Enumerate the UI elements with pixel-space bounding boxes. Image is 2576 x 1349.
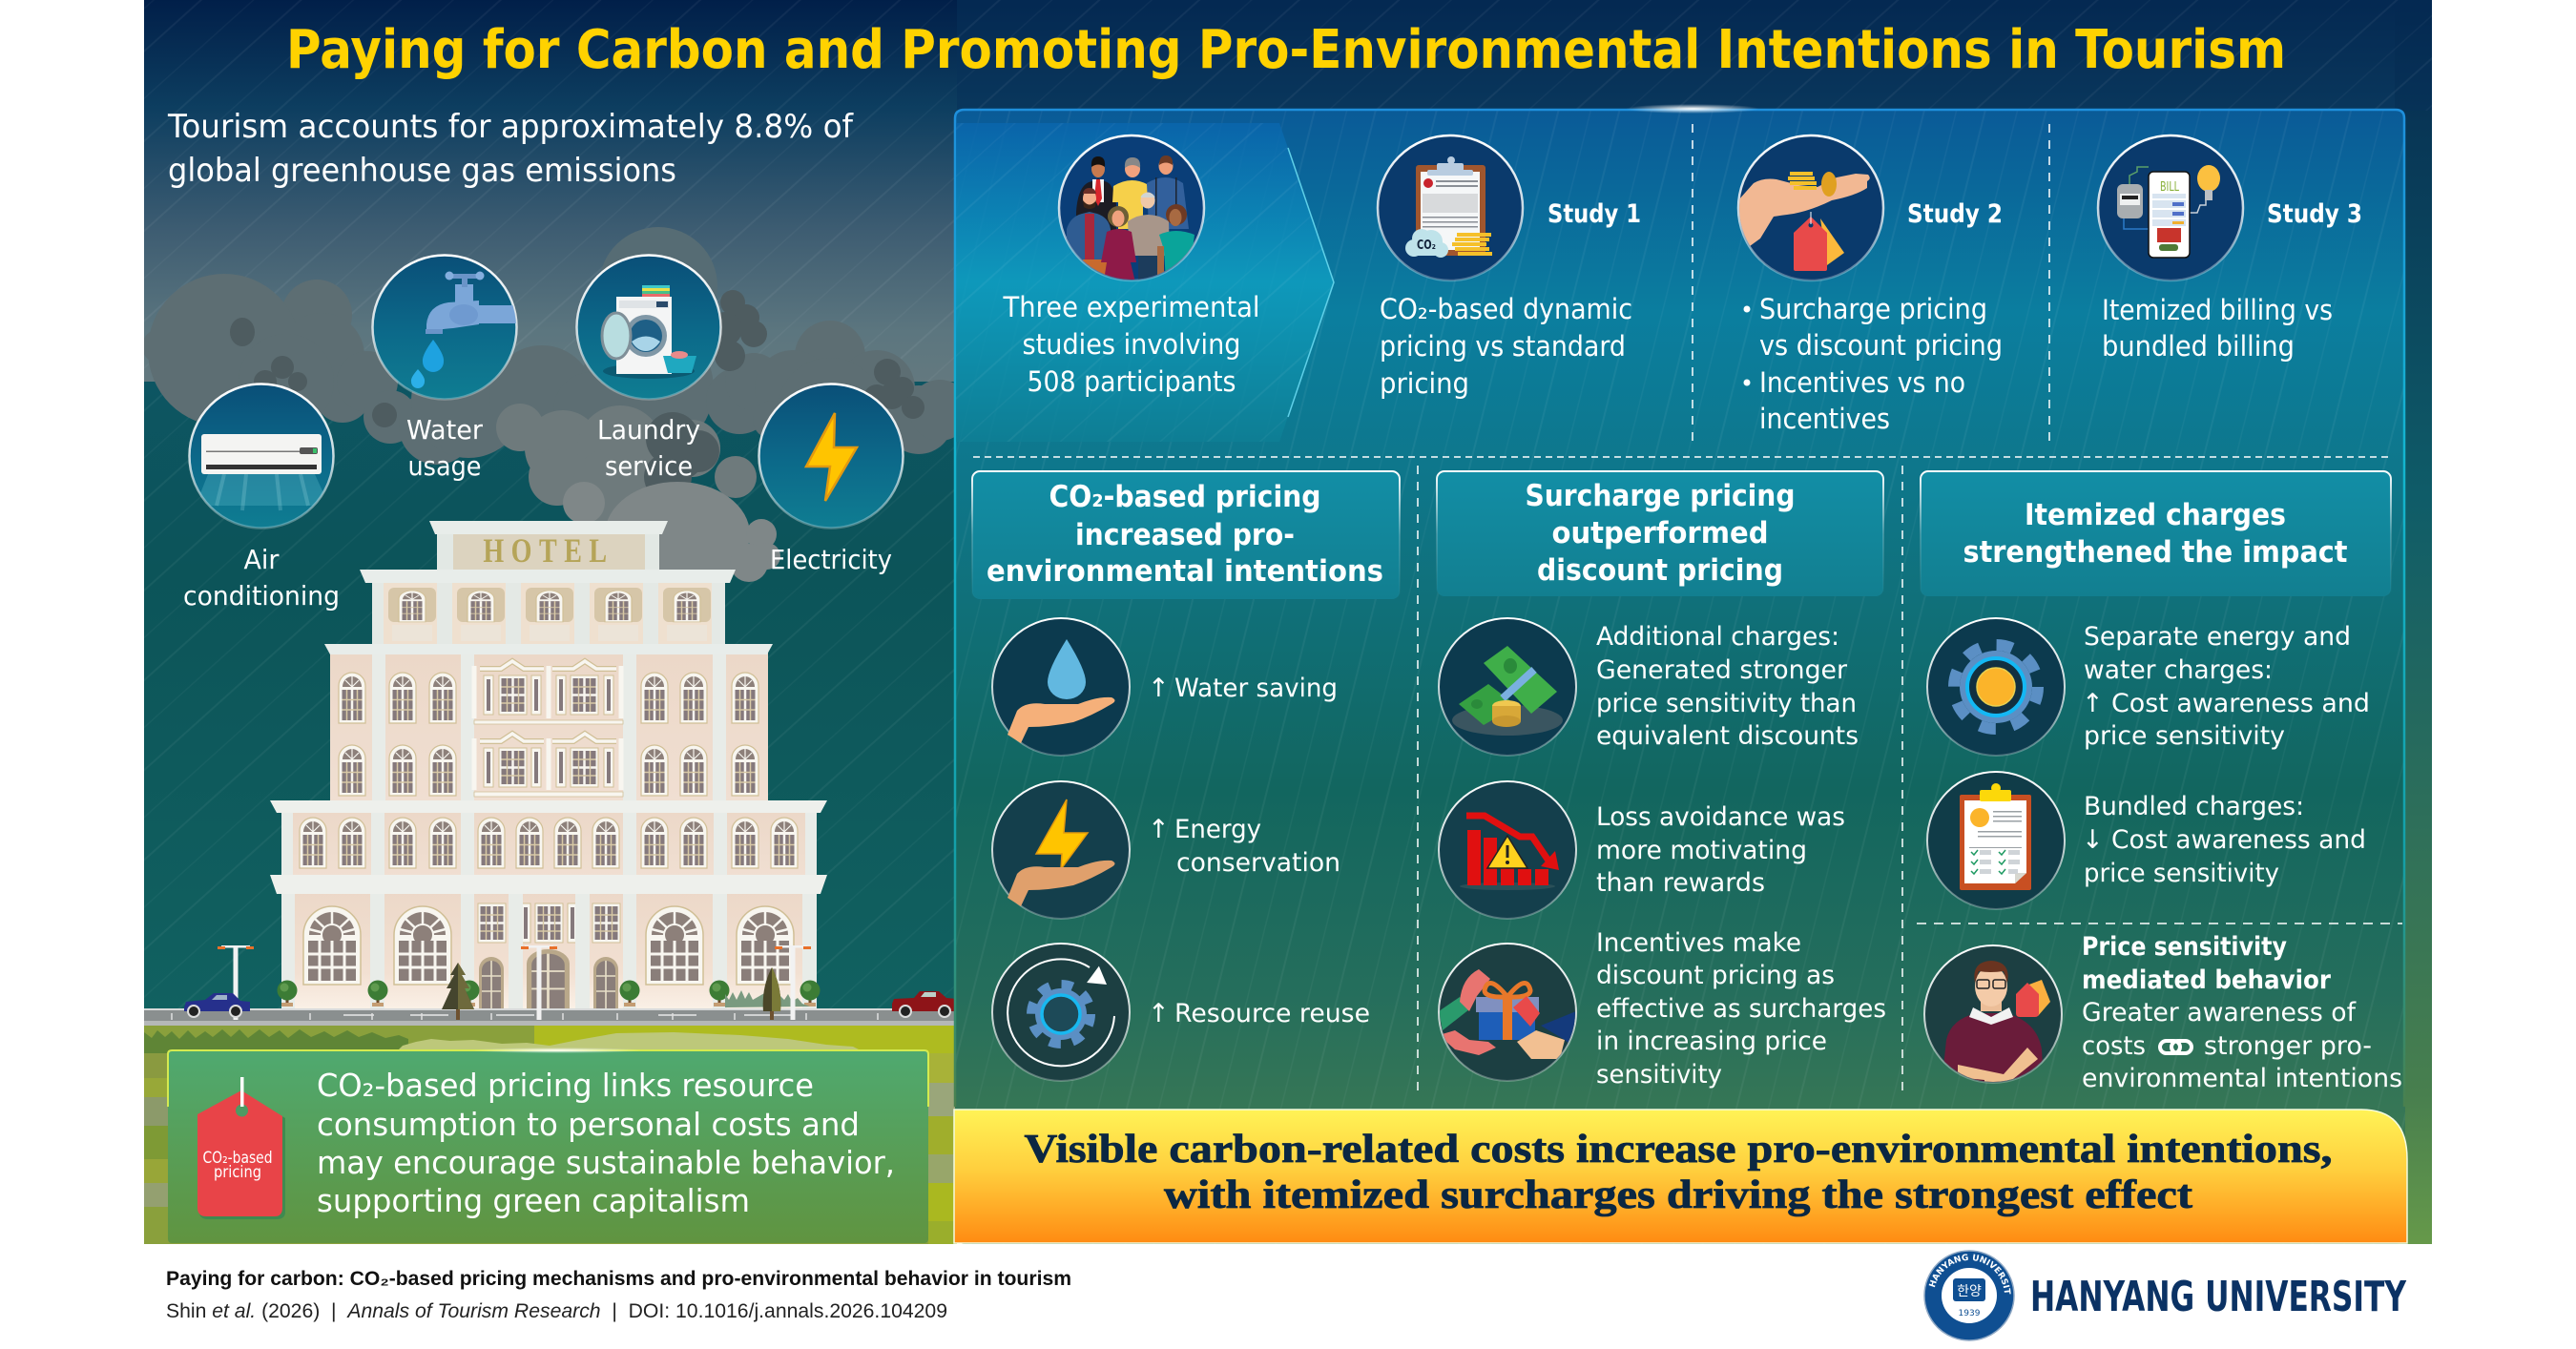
item: separate charges: water charges:: [2084, 655, 2273, 685]
item: incentives: sensitivity: [1596, 1060, 1722, 1090]
item: price sensitivity mediated behavior: environmental intentions: [2082, 1064, 2402, 1093]
hotel building: [270, 521, 827, 1008]
study 3: [2098, 135, 2362, 363]
icon: laundry: [576, 256, 721, 399]
item: incentives: discount pricing as: [1596, 961, 1835, 990]
header: CO2-based pricing: environmental intentions: [987, 554, 1383, 589]
panel: CO2 pricing callout: [168, 1048, 928, 1243]
item: energy conservation: [992, 781, 1340, 919]
street lamps: [218, 945, 811, 1020]
study 2 text: vs discount pricing: [1759, 329, 2003, 362]
study 1 text: pricing: [1380, 367, 1469, 400]
study 1 text: CO₂-based dynamic: [1380, 293, 1632, 325]
label: study 3: Study 3: [2267, 199, 2362, 229]
icon: air conditioning: [189, 384, 334, 529]
item: bundled charges: price sensitivity: [2084, 859, 2279, 888]
icon: red price tag: CO₂-based: [202, 1149, 273, 1168]
column 1: CO2-based pricing: [972, 471, 1400, 1081]
study 1 text: pricing vs standard: [1380, 330, 1626, 363]
callout text: supporting green capitalism: [317, 1182, 750, 1219]
header: CO2-based pricing: increased pro-: [1075, 518, 1295, 552]
middle tower wall: [330, 652, 768, 802]
header: surcharge pricing: discount pricing: [1537, 553, 1783, 588]
participants text: 508 participants: [1027, 365, 1236, 398]
blue car: [184, 993, 250, 1017]
item: price sensitivity mediated behavior: Greater awareness of: [2082, 998, 2357, 1027]
seal: 1939: [1959, 1309, 1981, 1318]
study 3 text: [2102, 294, 2333, 363]
item: energy conservation: ↑: [1148, 815, 1170, 844]
item: separate charges: Cost awareness and: [2111, 689, 2370, 718]
label: water usage: usage: [408, 450, 481, 482]
item: loss avoidance: than rewards: [1596, 868, 1765, 898]
seal: [1923, 1250, 2015, 1341]
item: price sensitivity mediated behavior: [1924, 932, 2402, 1093]
header: surcharge pricing: [1437, 471, 1883, 596]
footer citation: Shin et al. (2026) | Annals of Tourism Research | DOI: 10.1016/j.annals.2026.104209: [166, 1300, 947, 1322]
item: water saving: [992, 618, 1338, 756]
banner: key conclusion: with itemized surcharges driving the strongest effect: [1164, 1173, 2192, 1217]
item: separate charges: [1927, 618, 2370, 756]
arrow block: participants: [956, 123, 1334, 442]
header: surcharge pricing: outperformed: [1551, 516, 1769, 550]
label: air conditioning: conditioning: [183, 580, 340, 612]
item: price sensitivity mediated behavior: stronger pro-: [2204, 1031, 2372, 1061]
banner: key conclusion: Visible carbon-related costs increase pro-environmental intentions,: [1025, 1128, 2332, 1172]
study 3 text: bundled billing: [2102, 330, 2295, 363]
item: incentives: effective as surcharges: [1596, 994, 1886, 1024]
item: resource reuse: ↑: [1148, 999, 1170, 1028]
header: itemized charges: [1921, 471, 2391, 596]
callout text: consumption to personal costs and: [317, 1106, 860, 1143]
item: bundled charges: Bundled charges:: [2084, 792, 2304, 821]
participants text: Three experimental: [1003, 291, 1259, 323]
second floor: [281, 811, 817, 878]
callout text: [317, 1067, 895, 1219]
header: surcharge pricing: Surcharge pricing: [1525, 479, 1796, 513]
study 1 text: [1380, 293, 1632, 400]
upper floor wall: [372, 580, 725, 645]
study 2 text: Incentives vs no: [1759, 366, 1965, 399]
smoke clouds: [142, 227, 970, 587]
icon: clipboard with CO2 cloud: [1378, 135, 1523, 280]
label: study 1: Study 1: [1548, 199, 1641, 229]
study 3 text: Itemized billing vs: [2102, 294, 2333, 326]
label: study 2: Study 2: [1907, 199, 2003, 229]
label: water usage: [406, 414, 483, 482]
item: price sensitivity mediated behavior: Price sensitivity: [2082, 932, 2287, 962]
study 2 text: incentives: [1759, 403, 1890, 435]
item: separate charges: price sensitivity: [2084, 721, 2285, 751]
label: water usage: Water: [406, 414, 483, 446]
column 3: itemized charges: [1917, 471, 2402, 1093]
icon: link between awareness and intentions: [2160, 1041, 2192, 1053]
study 2 text: Surcharge pricing: [1759, 293, 1987, 325]
item: bundled charges: Cost awareness and: [2111, 825, 2366, 855]
icon: clipboard with CO2 cloud: CO₂: [1417, 239, 1436, 253]
participants text: studies involving: [1023, 328, 1240, 361]
footer citation: [166, 1268, 1071, 1322]
item: additional charges: Generated stronger: [1596, 655, 1848, 685]
icon: phone bill and meter: [2098, 135, 2243, 280]
header: itemized charges: Itemized charges: [2025, 498, 2286, 532]
item: separate charges: Separate energy and: [2084, 622, 2351, 652]
item: additional charges: Additional charges:: [1596, 622, 1839, 652]
item: bundled charges: ↓: [2082, 825, 2104, 855]
study 2 text: [1744, 293, 2003, 435]
label: laundry service: service: [605, 450, 693, 482]
item: loss avoidance: Loss avoidance was: [1596, 802, 1845, 832]
header: CO2-based pricing: [972, 471, 1400, 599]
label: air conditioning: [183, 544, 340, 612]
item: incentives: [1439, 928, 1886, 1090]
participants text: [1003, 291, 1259, 398]
icon: hand with coins and price tag: [1738, 135, 1883, 280]
icon: phone bill and meter: BILL: [2160, 180, 2180, 195]
item: loss avoidance: [1439, 781, 1845, 919]
centre bay windows: [474, 661, 623, 797]
header: CO2-based pricing: CO₂-based pricing: [1049, 480, 1320, 514]
item: energy conservation: conservation: [1176, 848, 1340, 878]
item: additional charges: equivalent discounts: [1596, 721, 1859, 751]
study 1: [1378, 135, 1641, 400]
label: laundry service: [597, 414, 700, 482]
ground floor: [281, 889, 817, 1008]
item: price sensitivity mediated behavior: costs: [2082, 1031, 2146, 1061]
item: resource reuse: Resource reuse: [1174, 999, 1370, 1028]
item: incentives: in increasing price: [1596, 1027, 1827, 1056]
logo: Hanyang University: HANYANG UNIVERSITY: [2030, 1273, 2407, 1321]
callout text: may encourage sustainable behavior,: [317, 1144, 895, 1181]
item: price sensitivity mediated behavior: mediated behavior: [2082, 965, 2332, 995]
banner: key conclusion: [954, 1110, 2407, 1243]
red car: [892, 991, 957, 1017]
road, trees, lamps and cars: [144, 945, 957, 1026]
tree: [442, 963, 474, 1020]
seal: HANYANG UNIVERSITY: [1929, 1254, 2011, 1294]
item: water saving: ↑: [1148, 674, 1170, 703]
item: additional charges: [1439, 618, 1859, 756]
label: laundry service: Laundry: [597, 414, 700, 446]
callout text: CO₂-based pricing links resource: [317, 1067, 814, 1104]
intro text: tourism emissions: [167, 108, 854, 190]
panel: studies and findings: [955, 104, 2405, 1244]
item: additional charges: price sensitivity than: [1596, 689, 1857, 718]
icon: red price tag: [197, 1077, 285, 1219]
item: separate charges: ↑: [2082, 689, 2104, 718]
header: itemized charges: strengthened the impact: [1963, 535, 2348, 570]
hotel sign block: [429, 521, 668, 572]
column 2: surcharge pricing: [1437, 471, 1886, 1090]
item: energy conservation: Energy: [1174, 815, 1261, 844]
item: resource reuse: [992, 944, 1370, 1081]
grass foreground: [144, 1026, 957, 1244]
label: electricity: Electricity: [770, 544, 892, 575]
intro text: tourism emissions: global greenhouse gas emissions: [168, 152, 676, 190]
item: loss avoidance: more motivating: [1596, 836, 1807, 865]
label: air conditioning: Air: [244, 544, 280, 575]
hotel sign block: HOTEL: [483, 531, 614, 570]
item: incentives: Incentives make: [1596, 928, 1801, 958]
icon: electricity bolt: [759, 384, 903, 529]
icon: water tap: [372, 256, 520, 399]
item: water saving: Water saving: [1174, 674, 1338, 703]
icon: red price tag: pricing: [214, 1163, 261, 1182]
seal: 한양: [1957, 1281, 1982, 1300]
item: bundled charges: [1927, 772, 2366, 909]
tree: [763, 967, 780, 1020]
study 2: [1738, 135, 2003, 435]
intro text: tourism emissions: Tourism accounts for approximately 8.8% of: [167, 108, 854, 146]
footer citation: Paying for carbon: CO₂-based pricing mechanisms and pro-environmental behavior in tourism: [166, 1268, 1071, 1290]
icon: group of people: [1059, 135, 1204, 288]
title: Paying for Carbon and Promoting Pro-Environmental Intentions in Tourism: [286, 19, 2286, 81]
